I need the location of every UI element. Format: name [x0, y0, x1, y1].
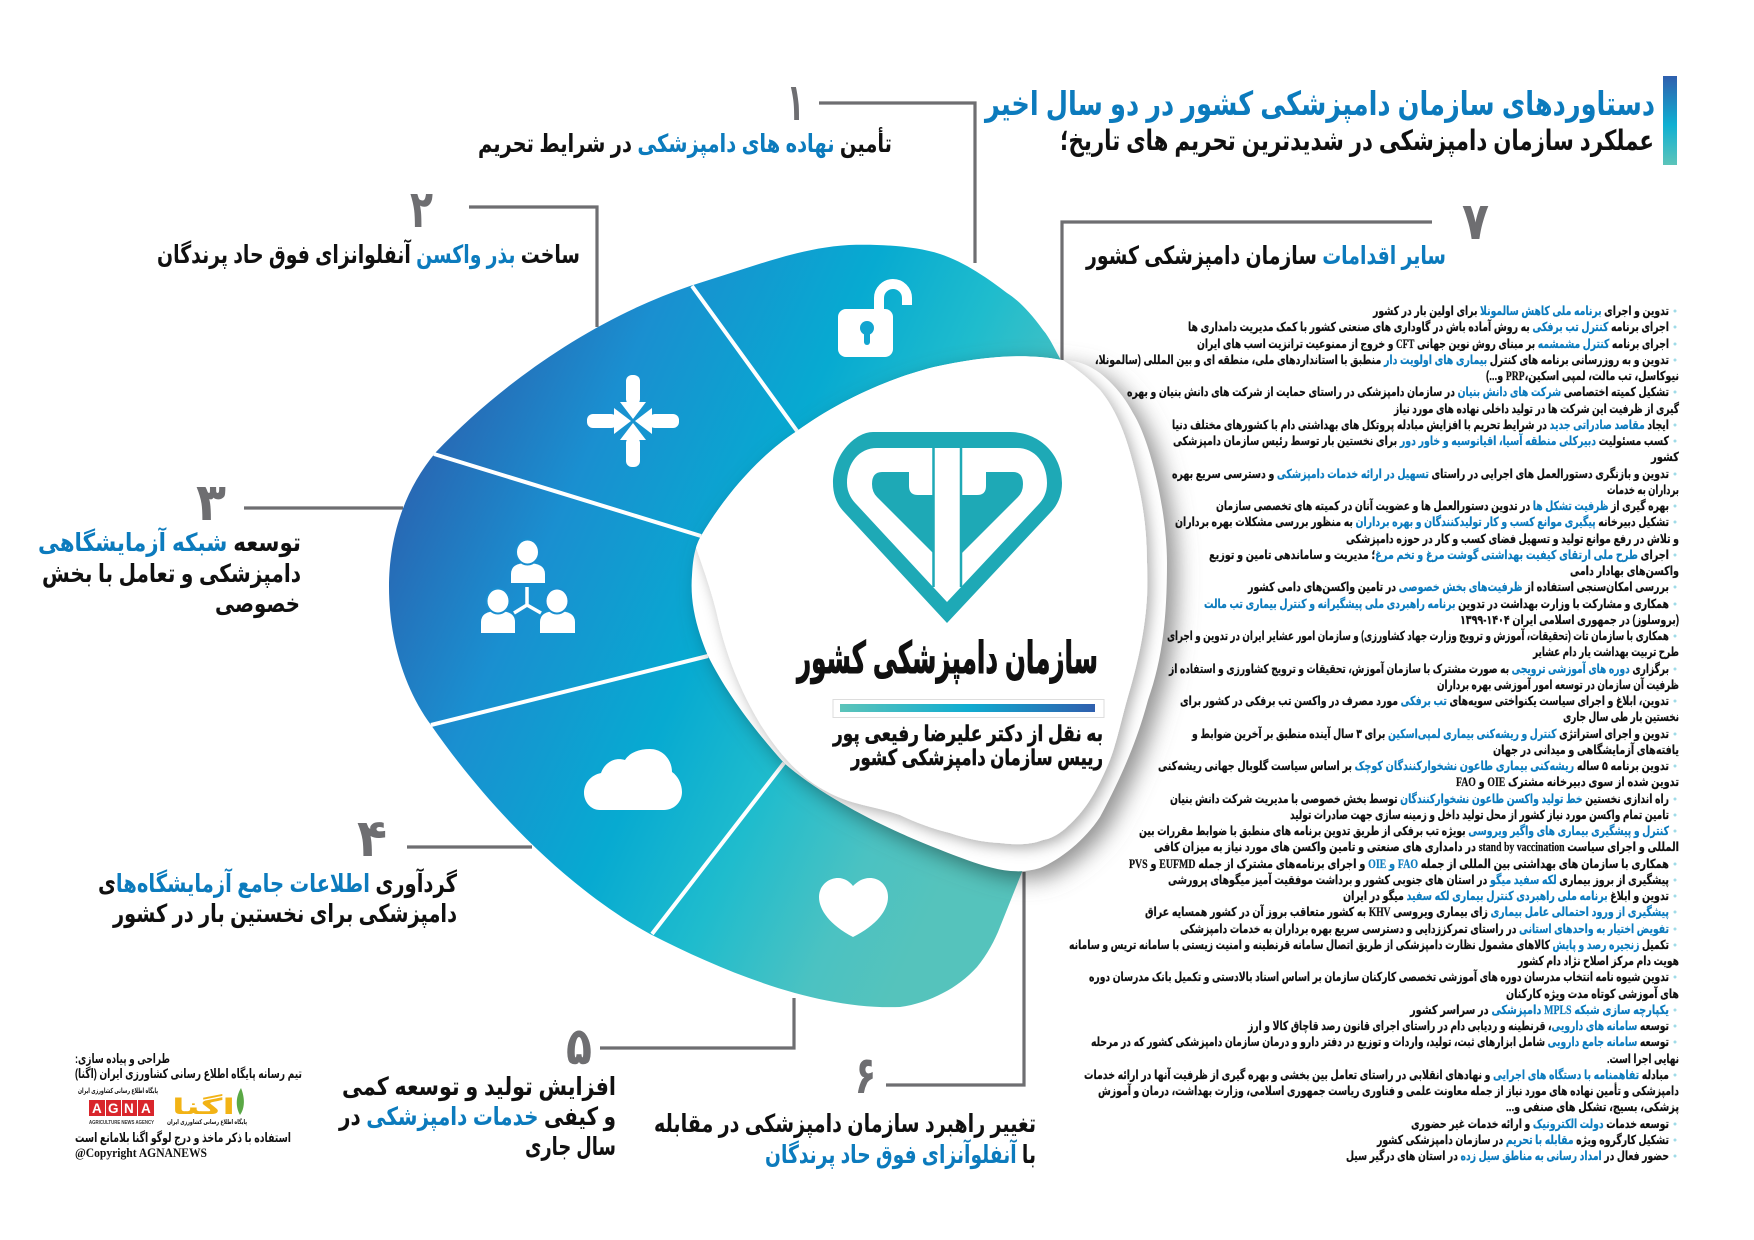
- item 7 list of actions: کشور: [1650, 450, 1680, 464]
- item 7 list of actions: توسعه سامانه جامع دارویی شامل ابزارهای ثبت، تولید، واردات و توزیع در دفتر دارو و درمان سازمان دامپزشکی کشور که در مرحله: [1091, 1035, 1669, 1049]
- item 7 list of actions: پیشگیری از ورود احتمالی عامل بیماری زای بیماری ویروسی KHV به کشور متعاقب بروز آن در کشور همسایه عراق: [1145, 904, 1669, 919]
- item 5: ۵: [566, 1018, 592, 1076]
- organisation wordmark: سازمان دامپزشکی کشور: [796, 634, 1098, 684]
- item 7 heading: سایر اقدامات سازمان دامپزشکی کشور: [1084, 242, 1446, 271]
- item 3: دامپزشکی و تعامل با بخش: [42, 560, 301, 589]
- item 7 list of actions: طرح تربیت بهداشت یار دام عشایر: [1532, 645, 1679, 660]
- item 7 list of actions: مبادله تفاهمنامه با دستگاه های اجرایی و نهادهای انقلابی در راستای تعامل بین بخشی و بهره گیری از ظرفیت آنها در ارائه خدمات: [1084, 1067, 1669, 1082]
- emblem shield: [833, 432, 1062, 623]
- item 7 list of actions: حضور فعال در امداد رسانی به مناطق سیل زده در استان های درگیر سیل: [1346, 1148, 1669, 1163]
- item 7 list of actions: هویت دام مرکز اصلاح نژاد دام کشور: [1517, 954, 1679, 969]
- item 7 list of actions: پیشگیری از بروز بیماری لکه سفید میگو در استان های جنوبی کشور و برداشت موفقیت آمیز میگوهای پرورشی: [1168, 872, 1669, 887]
- item 7 list of actions: یکپارچه سازی شبکه MPLS دامپزشکی در سراسر کشور: [1409, 1003, 1669, 1017]
- AGNA logo: A: [141, 1101, 151, 1116]
- item 7 list of actions: بررسی امکان‌سنجی استفاده از ظرفیت‌های بخش خصوصی در تامین واکسن‌های دامی کشور: [1247, 580, 1669, 594]
- copyright note: استفاده با ذکر ماخذ و درج لوگو اگنا بلامانع است: [75, 1130, 291, 1146]
- item 7 list of actions: توسعه سامانه های دارویی، قرنطینه و ردیابی دام در راستای اجرای قانون رصد قاچاق کالا و ارز: [1247, 1019, 1669, 1034]
- attribution: [832, 721, 1103, 771]
- item 7 list of actions: واکسن‌های بهادار دامی: [1570, 564, 1679, 578]
- blob body: [389, 245, 1100, 1007]
- item 7 list of actions: برگزاری دوره های آموزشی ترویجی به صورت مشترک با سازمان آموزش، تحقیقات و ترویج کشاورزی و استفاده از: [1168, 661, 1669, 676]
- AGNA logo: پایگاه اطلاع رسانی کشاورزی ایران: [78, 1086, 158, 1095]
- segmented blob chart: [389, 245, 1100, 1007]
- item 7 list of actions: های آموزشی کوتاه مدت ویژه کارکنان: [1506, 986, 1679, 1001]
- AGNA logo: [78, 1086, 158, 1126]
- AGNA logo: N: [124, 1101, 134, 1116]
- item 7 list of actions: همکاری و مشارکت با وزارت بهداشت در تدوین برنامه راهبردی ملی پیشگیرانه و کنترل بیماری تب مالت: [1204, 596, 1669, 611]
- Agna Persian logo: اگنا: [172, 1093, 235, 1119]
- item 1: ۱: [787, 74, 804, 132]
- item 7 list of actions: تشکیل کارگروه ویژه مقابله با تحریم در سازمان دامپزشکی کشور: [1376, 1132, 1669, 1147]
- credits block: تیم رسانه پایگاه اطلاع رسانی کشاورزی ایران (اگنا): [75, 1066, 302, 1081]
- item 7 list of actions: همکاری با سازمان های بهداشتی بین المللی از جمله FAO و OIE و اجرای برنامه‌های مشترک از جمله EUFMD و PVS: [1129, 857, 1669, 871]
- attribution: رییس سازمان دامپزشکی کشور: [850, 745, 1103, 771]
- item 7 list of actions: راه اندازی نخستین خط تولید واکسن طاعون نشخوارکنندگان توسط بخش خصوصی با مدیریت شرکت دانش بنیان: [1170, 791, 1669, 806]
- item 7 list of actions: یافته‌های آزمایشگاهی و میدانی در جهان: [1493, 742, 1679, 757]
- item 7 list of actions: برداران به خدمات: [1607, 483, 1679, 497]
- centre badge: [690, 347, 1177, 879]
- item 7 list of actions: المللی و اجرای سیاست stand by vaccination در دامداری های صنعتی و تامین واکسن های مورد نیاز به میزان کافی: [1154, 840, 1679, 854]
- item 6: [654, 1047, 1036, 1170]
- item 7 heading: [1084, 193, 1489, 271]
- badge inner shape: [690, 347, 1147, 844]
- item 6: ۶: [855, 1047, 876, 1105]
- item 5: و کیفی خدمات دامپزشکی در: [337, 1103, 616, 1132]
- icon: open lock: [838, 284, 907, 357]
- segment dividers: [431, 286, 797, 934]
- item 5: سال جاری: [525, 1133, 616, 1161]
- item 7 list of actions: اجرای برنامه کنترل تب برفکی به روش آماده باش در گاوداری های صنعتی کشور با کمک مدیریت دامداری ها: [1188, 319, 1669, 334]
- icon: people network: [481, 540, 575, 633]
- icon: converging arrows: [587, 375, 679, 467]
- item 7 heading: ۷: [1462, 193, 1489, 251]
- item 7 list of actions: ایجاد مقاصد صادراتی جدید در شرایط تحریم با افزایش مبادله پروتکل های بهداشتی دام با کشورهای مختلف دنیا: [1172, 418, 1669, 433]
- gradient rule: [833, 700, 1104, 718]
- item 2: ساخت بذر واکسن آنفلوانزای فوق حاد پرندگان: [157, 239, 580, 270]
- item 7 list of actions: کسب مسئولیت دبیرکلی منطقه آسیا، اقیانوسیه و خاور دور برای نخستین بار توسط رئیس سازمان دامپزشکی: [1173, 433, 1670, 448]
- item 6: با آنفلوآنزای فوق حاد پرندگان: [765, 1139, 1036, 1170]
- attribution: به نقل از دکتر علیرضا رفیعی پور: [832, 721, 1103, 747]
- icon: cloud: [584, 749, 682, 810]
- item 7 list of actions: اجرای طرح ملی ارتقای کیفیت بهداشتی گوشت مرغ و تخم مرغ؛ مدیریت و ساماندهی تامین و توزیع: [1209, 547, 1669, 562]
- item 7 list of actions: [1069, 304, 1680, 1163]
- item 7 list of actions: تکمیل زنجیره رصد و پایش کالاهای مشمول نظارت دامپزشکی از طریق اتصال سامانه قرنطینه و امنیت زیستی با سامانه تریس و سامانه: [1069, 938, 1669, 952]
- item 7 list of actions: تدوین و به روزرسانی برنامه های کنترل بیماری های اولویت دار منطبق با استانداردهای ملی، منطقه ای و بین المللی (سالمونلا،: [1095, 353, 1669, 367]
- item 3: [38, 474, 301, 619]
- item 3: خصوصی: [215, 590, 300, 619]
- item 7 list of actions: تدوین برنامه ۵ ساله ریشه‌کنی بیماری طاعون نشخوارکنندگان کوچک بر اساس سیاست گلوبال جهانی ریشه‌کنی: [1158, 758, 1669, 773]
- item 4: ۴: [357, 810, 387, 868]
- connector lines: [244, 103, 1432, 1085]
- item 7 list of actions: تدوین شده از سوی دبیرخانه مشترک OIE و FAO: [1456, 775, 1679, 789]
- item 7 list of actions: پزشکی، بسیج، تشکل های صنفی و...: [1506, 1100, 1679, 1114]
- Agna Persian logo: پایگاه اطلاع رسانی کشاورزی ایران: [167, 1118, 247, 1126]
- item 7 list of actions: نخستین بار طی سال جاری: [1563, 710, 1679, 724]
- item 7 list of actions: تدوین و اجرای استراتژی کنترل و ریشه‌کنی بیماری لمپی‌اسکین برای ۳ سال آینده منطبق بر آخرین ضوابط و: [1191, 726, 1669, 741]
- credits block: @Copyright AGNANEWS: [75, 1145, 207, 1160]
- item 7 list of actions: نیوکاسل، تب مالت، لمپی اسکین،PRP و...): [1486, 369, 1679, 383]
- item 7 list of actions: تفویض اختیار به واحدهای استانی در راستای تمرکززدایی و دسترسی سریع بهره برداران به خدمات دامپزشکی: [1180, 922, 1669, 936]
- item 7 list of actions: اجرای برنامه کنترل مشمشمه بر مبنای روش نوین جهانی CFT و خروج از ممنوعیت ترانزیت اسب های ایران: [1197, 337, 1669, 351]
- item 7 list of actions: بهره گیری از ظرفیت تشکل ها در تدوین دستورالعمل ها و عضویت آنان در کمیته های تخصصی سازمان: [1216, 498, 1669, 513]
- item 5: افزایش تولید و توسعه کمی: [342, 1073, 616, 1102]
- item 7 list of actions: تشکیل کمیته اختصاصی شرکت های دانش بنیان در سازمان دامپزشکی در راستای حمایت از شرکت های دانش بنیان و بهره: [1127, 385, 1669, 399]
- badge shadow: [702, 364, 1177, 879]
- AGNA logo: G: [108, 1101, 119, 1116]
- Agna Persian logo: [167, 1088, 247, 1126]
- item 2: ۲: [410, 181, 433, 239]
- item 7 list of actions: تدوین و ابلاغ برنامه ملی راهبردی کنترل بیماری لکه سفید میگو در ایران: [1343, 888, 1669, 903]
- AGNA logo: AGRICULTURE NEWS AGENCY: [89, 1120, 154, 1126]
- title block: [983, 76, 1677, 165]
- item 4: دامپزشکی برای نخستین بار در کشور: [111, 900, 457, 929]
- credits text: طراحی و پیاده سازی:: [75, 1051, 170, 1066]
- item 7 list of actions: (بروسلوز) در جمهوری اسلامی ایران ۱۴۰۴-۱۳۹۹: [1460, 613, 1679, 627]
- item 1: تأمین نهاده های دامپزشکی در شرایط تحریم: [478, 127, 892, 159]
- badge outer rim: [692, 356, 1167, 871]
- icon: heart: [819, 878, 888, 937]
- item 1: [478, 74, 892, 159]
- credits block: [75, 1051, 302, 1160]
- AGNA logo: A: [92, 1101, 102, 1116]
- item 7 list of actions: نهایی اجرا است.: [1607, 1052, 1679, 1066]
- item 7 list of actions: تدوین، ابلاغ و اجرای سیاست یکنواختی سویه‌های تب برفکی مورد مصرف در واکسن تب برفکی در کشور برای: [1180, 694, 1669, 708]
- item 3: توسعه شبکه آزمایشگاهی: [38, 527, 301, 558]
- item 6: تغییر راهبرد سازمان دامپزشکی در مقابله: [654, 1110, 1036, 1139]
- item 4: [98, 810, 457, 929]
- title accent bar: [1663, 76, 1677, 165]
- item 5: [337, 1018, 616, 1161]
- item 2: [157, 181, 580, 270]
- item 7 list of actions: توسعه خدمات دولت الکترونیک و ارائه خدمات غیر حضوری: [1411, 1117, 1669, 1131]
- item 4: گردآوری اطلاعات جامع آزمایشگاه‌های: [98, 868, 457, 899]
- item 7 list of actions: کنترل و پیشگیری بیماری های واگیر ویروسی بویژه تب برفکی از طریق تدوین برنامه های منطبق با ضوابط مقررات بین: [1139, 823, 1670, 838]
- item 7 list of actions: تشکیل دبیرخانه پیگیری موانع کسب و کار تولیدکنندگان و بهره برداران به منظور بررسی مشکلات بهره برداران: [1175, 514, 1669, 529]
- item 3: ۳: [196, 474, 226, 532]
- item 7 list of actions: تدوین و بازنگری دستورالعمل های اجرایی در راستای تسهیل در ارائه خدمات دامپزشکی و دسترسی سریع بهره: [1172, 466, 1669, 481]
- item 7 list of actions: تدوین و اجرای برنامه ملی کاهش سالمونلا برای اولین بار در کشور: [1372, 304, 1669, 318]
